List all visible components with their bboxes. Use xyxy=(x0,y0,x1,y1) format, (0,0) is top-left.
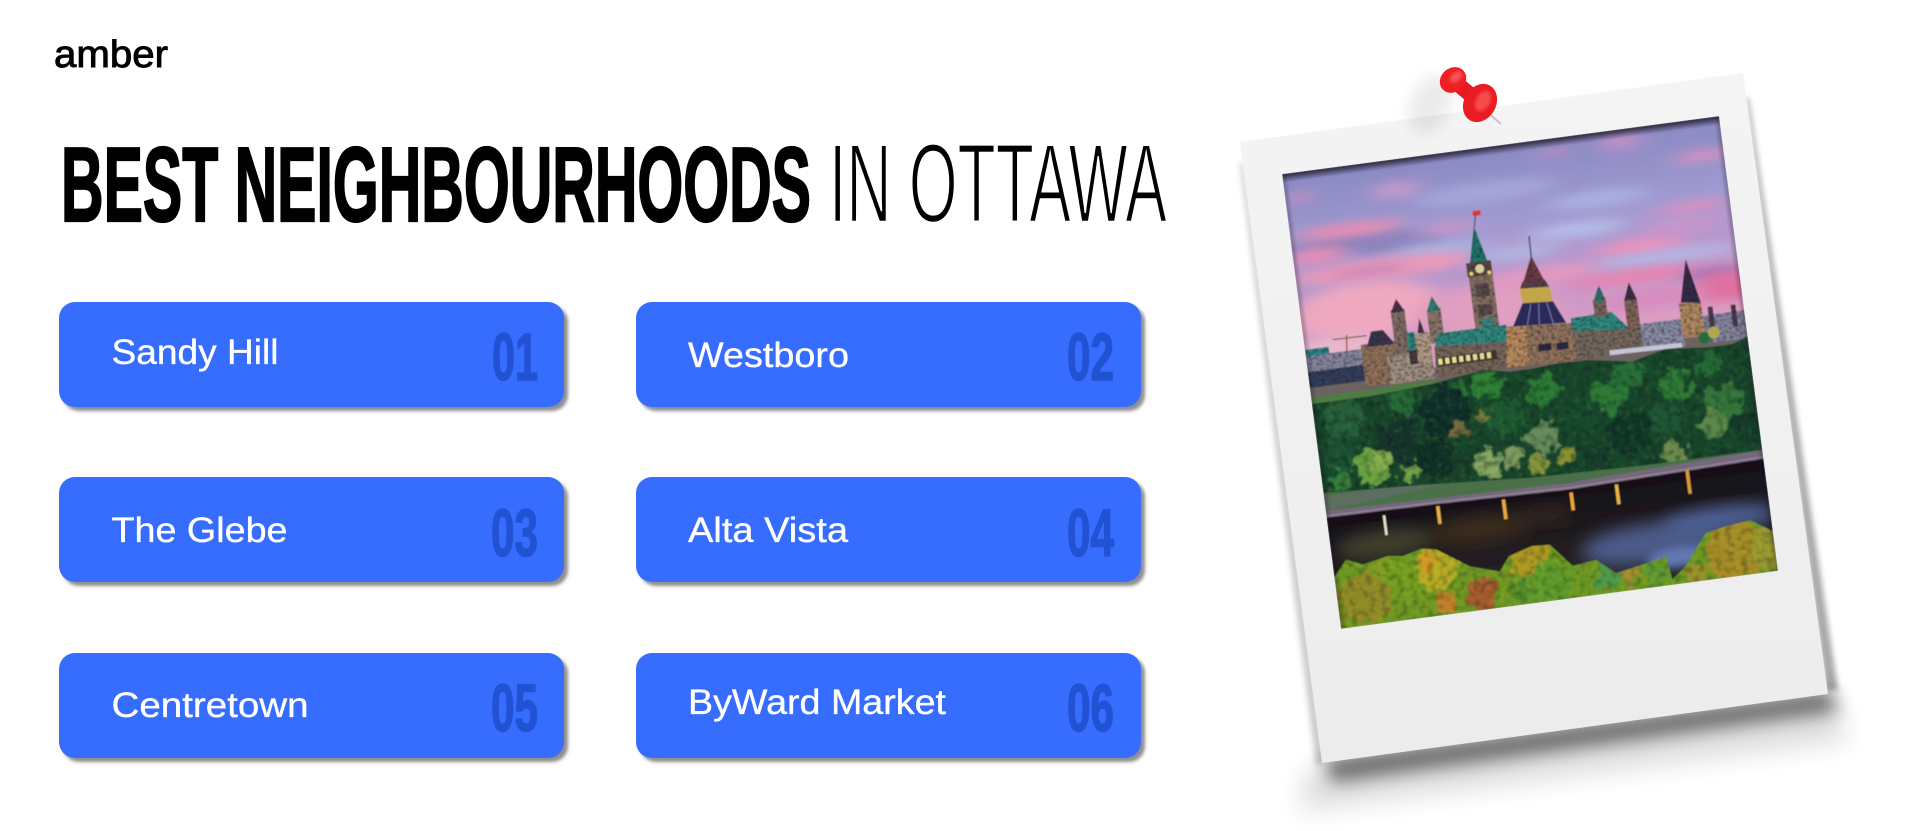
grass slope and lawn xyxy=(1311,380,1762,512)
card 03: The Glebe: The Glebe xyxy=(112,511,288,550)
parliament buildings xyxy=(1305,226,1748,388)
card 03: The Glebe: 03 xyxy=(491,496,538,571)
parliament details: dome, clock, flag xyxy=(1332,210,1720,368)
panel: neighbourhood cards xyxy=(59,302,1145,762)
photo inner shading xyxy=(1282,116,1778,629)
polaroid paper frame xyxy=(1240,73,1828,763)
autumn trees in foreground xyxy=(1334,520,1778,629)
card 02: Westboro: 02 xyxy=(1067,320,1114,395)
river with reflections xyxy=(1326,458,1785,629)
card 03: The Glebe xyxy=(59,477,568,586)
card 04: Alta Vista xyxy=(636,477,1145,586)
card 02: Westboro: Westboro xyxy=(688,336,849,375)
polaroid shadow xyxy=(1240,95,1848,812)
sky with sunset clouds xyxy=(1282,116,1750,368)
card 01: Sandy Hill: Sandy Hill xyxy=(112,333,278,372)
card 01: Sandy Hill xyxy=(59,302,568,411)
card 02: Westboro xyxy=(636,302,1145,411)
card 06: ByWard Market: 06 xyxy=(1067,671,1114,746)
card 06: ByWard Market: ByWard Market xyxy=(688,683,946,722)
card 05: Centretown xyxy=(59,653,568,762)
ground behind buildings xyxy=(1310,336,1750,399)
card 04: Alta Vista: 04 xyxy=(1067,496,1114,571)
forest on the hill xyxy=(1312,336,1762,494)
card 01: Sandy Hill: 01 xyxy=(492,320,538,395)
title: IN OTTAWA xyxy=(829,121,1167,246)
logo: amber: amber xyxy=(54,34,168,76)
title: BEST NEIGHBOURHOODS xyxy=(61,126,811,244)
card 05: Centretown: Centretown xyxy=(112,686,308,725)
card 05: Centretown: 05 xyxy=(491,671,538,746)
photo: parliament, trees and river xyxy=(1282,116,1778,629)
card 04: Alta Vista: Alta Vista xyxy=(688,511,849,550)
polaroid photo of Parliament Hill xyxy=(1240,62,1848,812)
red push pin xyxy=(1399,62,1504,140)
stone river bank xyxy=(1325,450,1764,522)
card 06: ByWard Market xyxy=(636,653,1145,762)
